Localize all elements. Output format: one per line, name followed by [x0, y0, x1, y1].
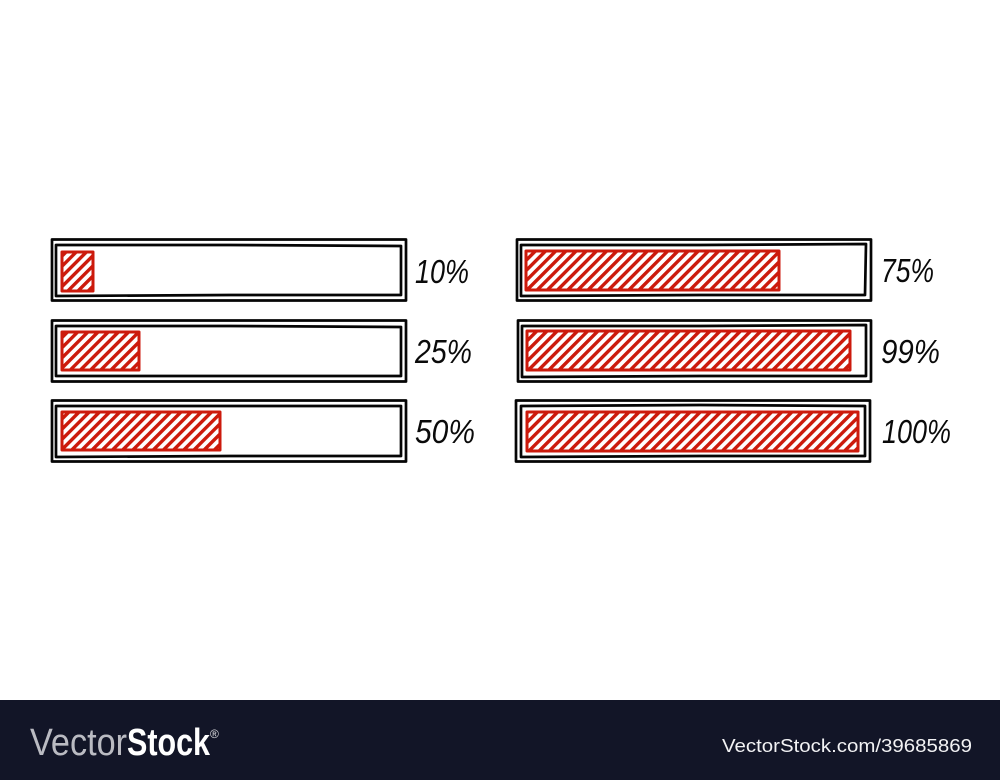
label 99%: 99%	[881, 333, 940, 370]
label 75%: 75%	[881, 252, 934, 289]
progress bar 50%	[52, 400, 475, 462]
progress bar 10%	[52, 240, 469, 300]
progress bar 99%	[518, 320, 940, 382]
label 25%: 25%	[414, 333, 472, 370]
progress bar 100%	[516, 400, 951, 462]
progress bar 75%	[517, 240, 934, 300]
label 50%: 50%	[415, 413, 475, 450]
image id text: VectorStock.com/39685869	[722, 736, 972, 756]
logo: VectorStock: Vector	[30, 722, 127, 764]
label 100%: 100%	[882, 413, 951, 450]
logo: VectorStock	[30, 722, 219, 764]
logo: VectorStock: Stock	[127, 722, 211, 764]
progress bar 25%	[52, 320, 472, 382]
logo: VectorStock: ®	[210, 727, 219, 741]
label 10%: 10%	[415, 253, 469, 290]
footer band	[0, 700, 1000, 780]
